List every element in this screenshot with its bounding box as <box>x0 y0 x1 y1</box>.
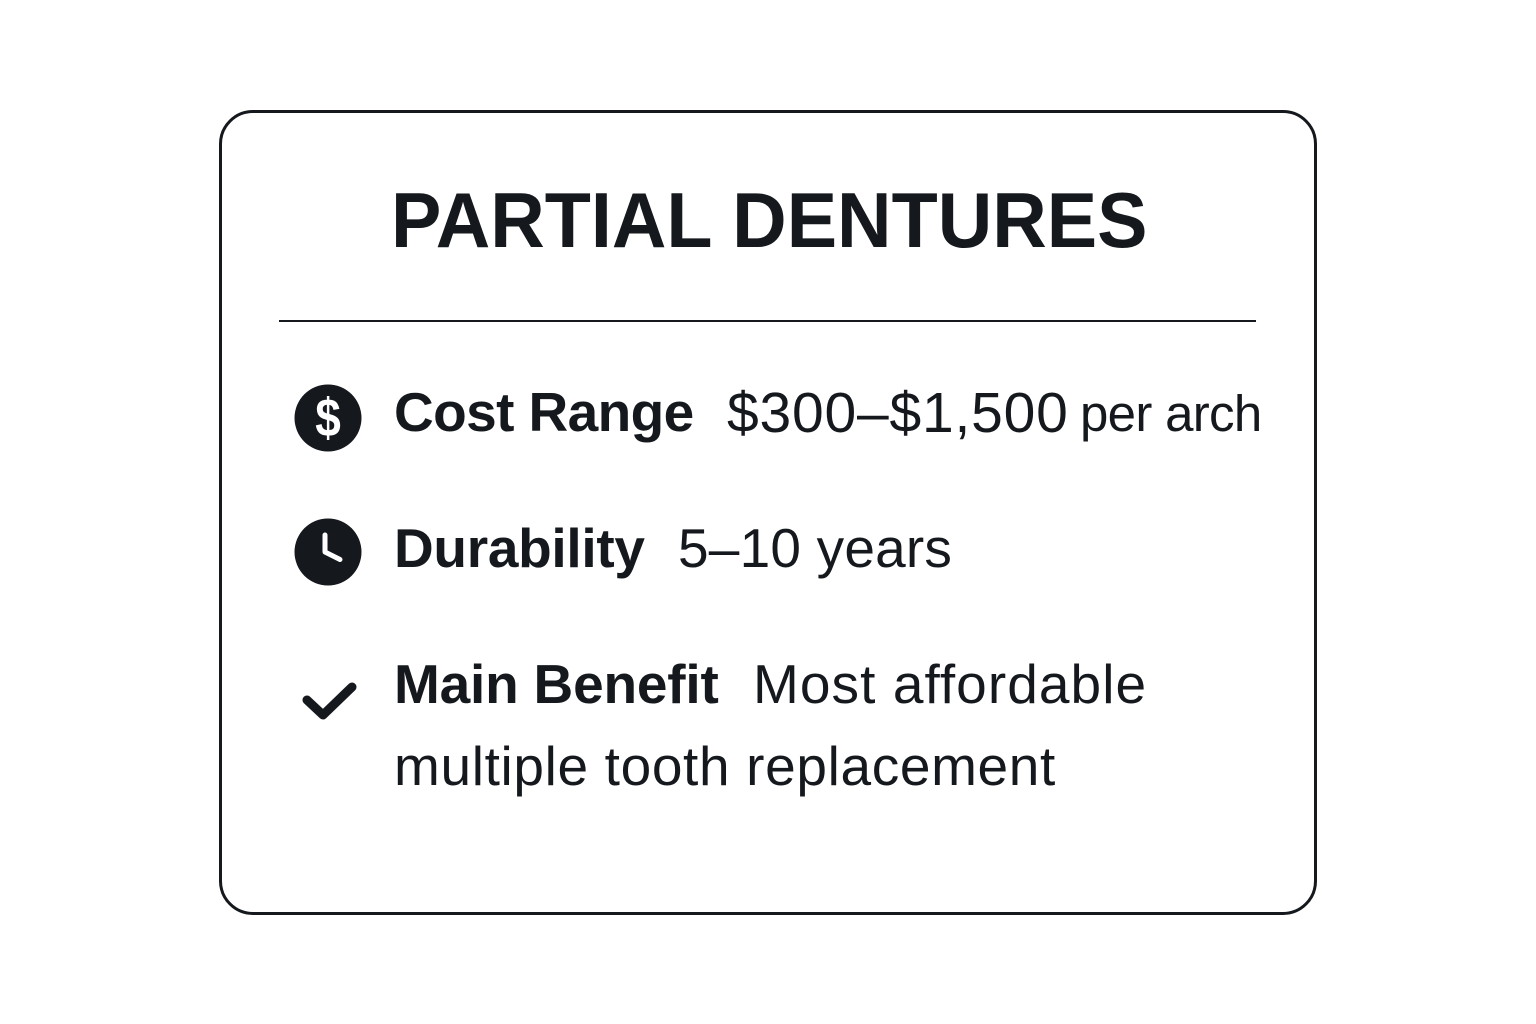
main benefit value line 2: multiple tooth replacement <box>394 735 1056 797</box>
cost range label: Cost Range <box>394 381 694 443</box>
title: PARTIAL DENTURES <box>391 176 1147 264</box>
main benefit value line 1: Most affordable <box>753 653 1147 715</box>
icon: dollar <box>294 384 362 452</box>
durability row <box>394 517 952 579</box>
durability label: Durability <box>394 517 645 579</box>
main benefit block <box>394 653 1147 797</box>
per arch: per arch <box>1080 385 1262 442</box>
icon: check <box>302 682 356 720</box>
icon: dollar: $ <box>315 388 341 448</box>
cost range value: $300–$1,500 <box>727 381 1069 445</box>
panel: partial dentures card <box>219 110 1317 915</box>
icon: clock <box>294 518 362 586</box>
main benefit label: Main Benefit <box>394 653 719 715</box>
cost range row <box>394 381 1262 445</box>
durability value: 5–10 years <box>678 517 952 579</box>
